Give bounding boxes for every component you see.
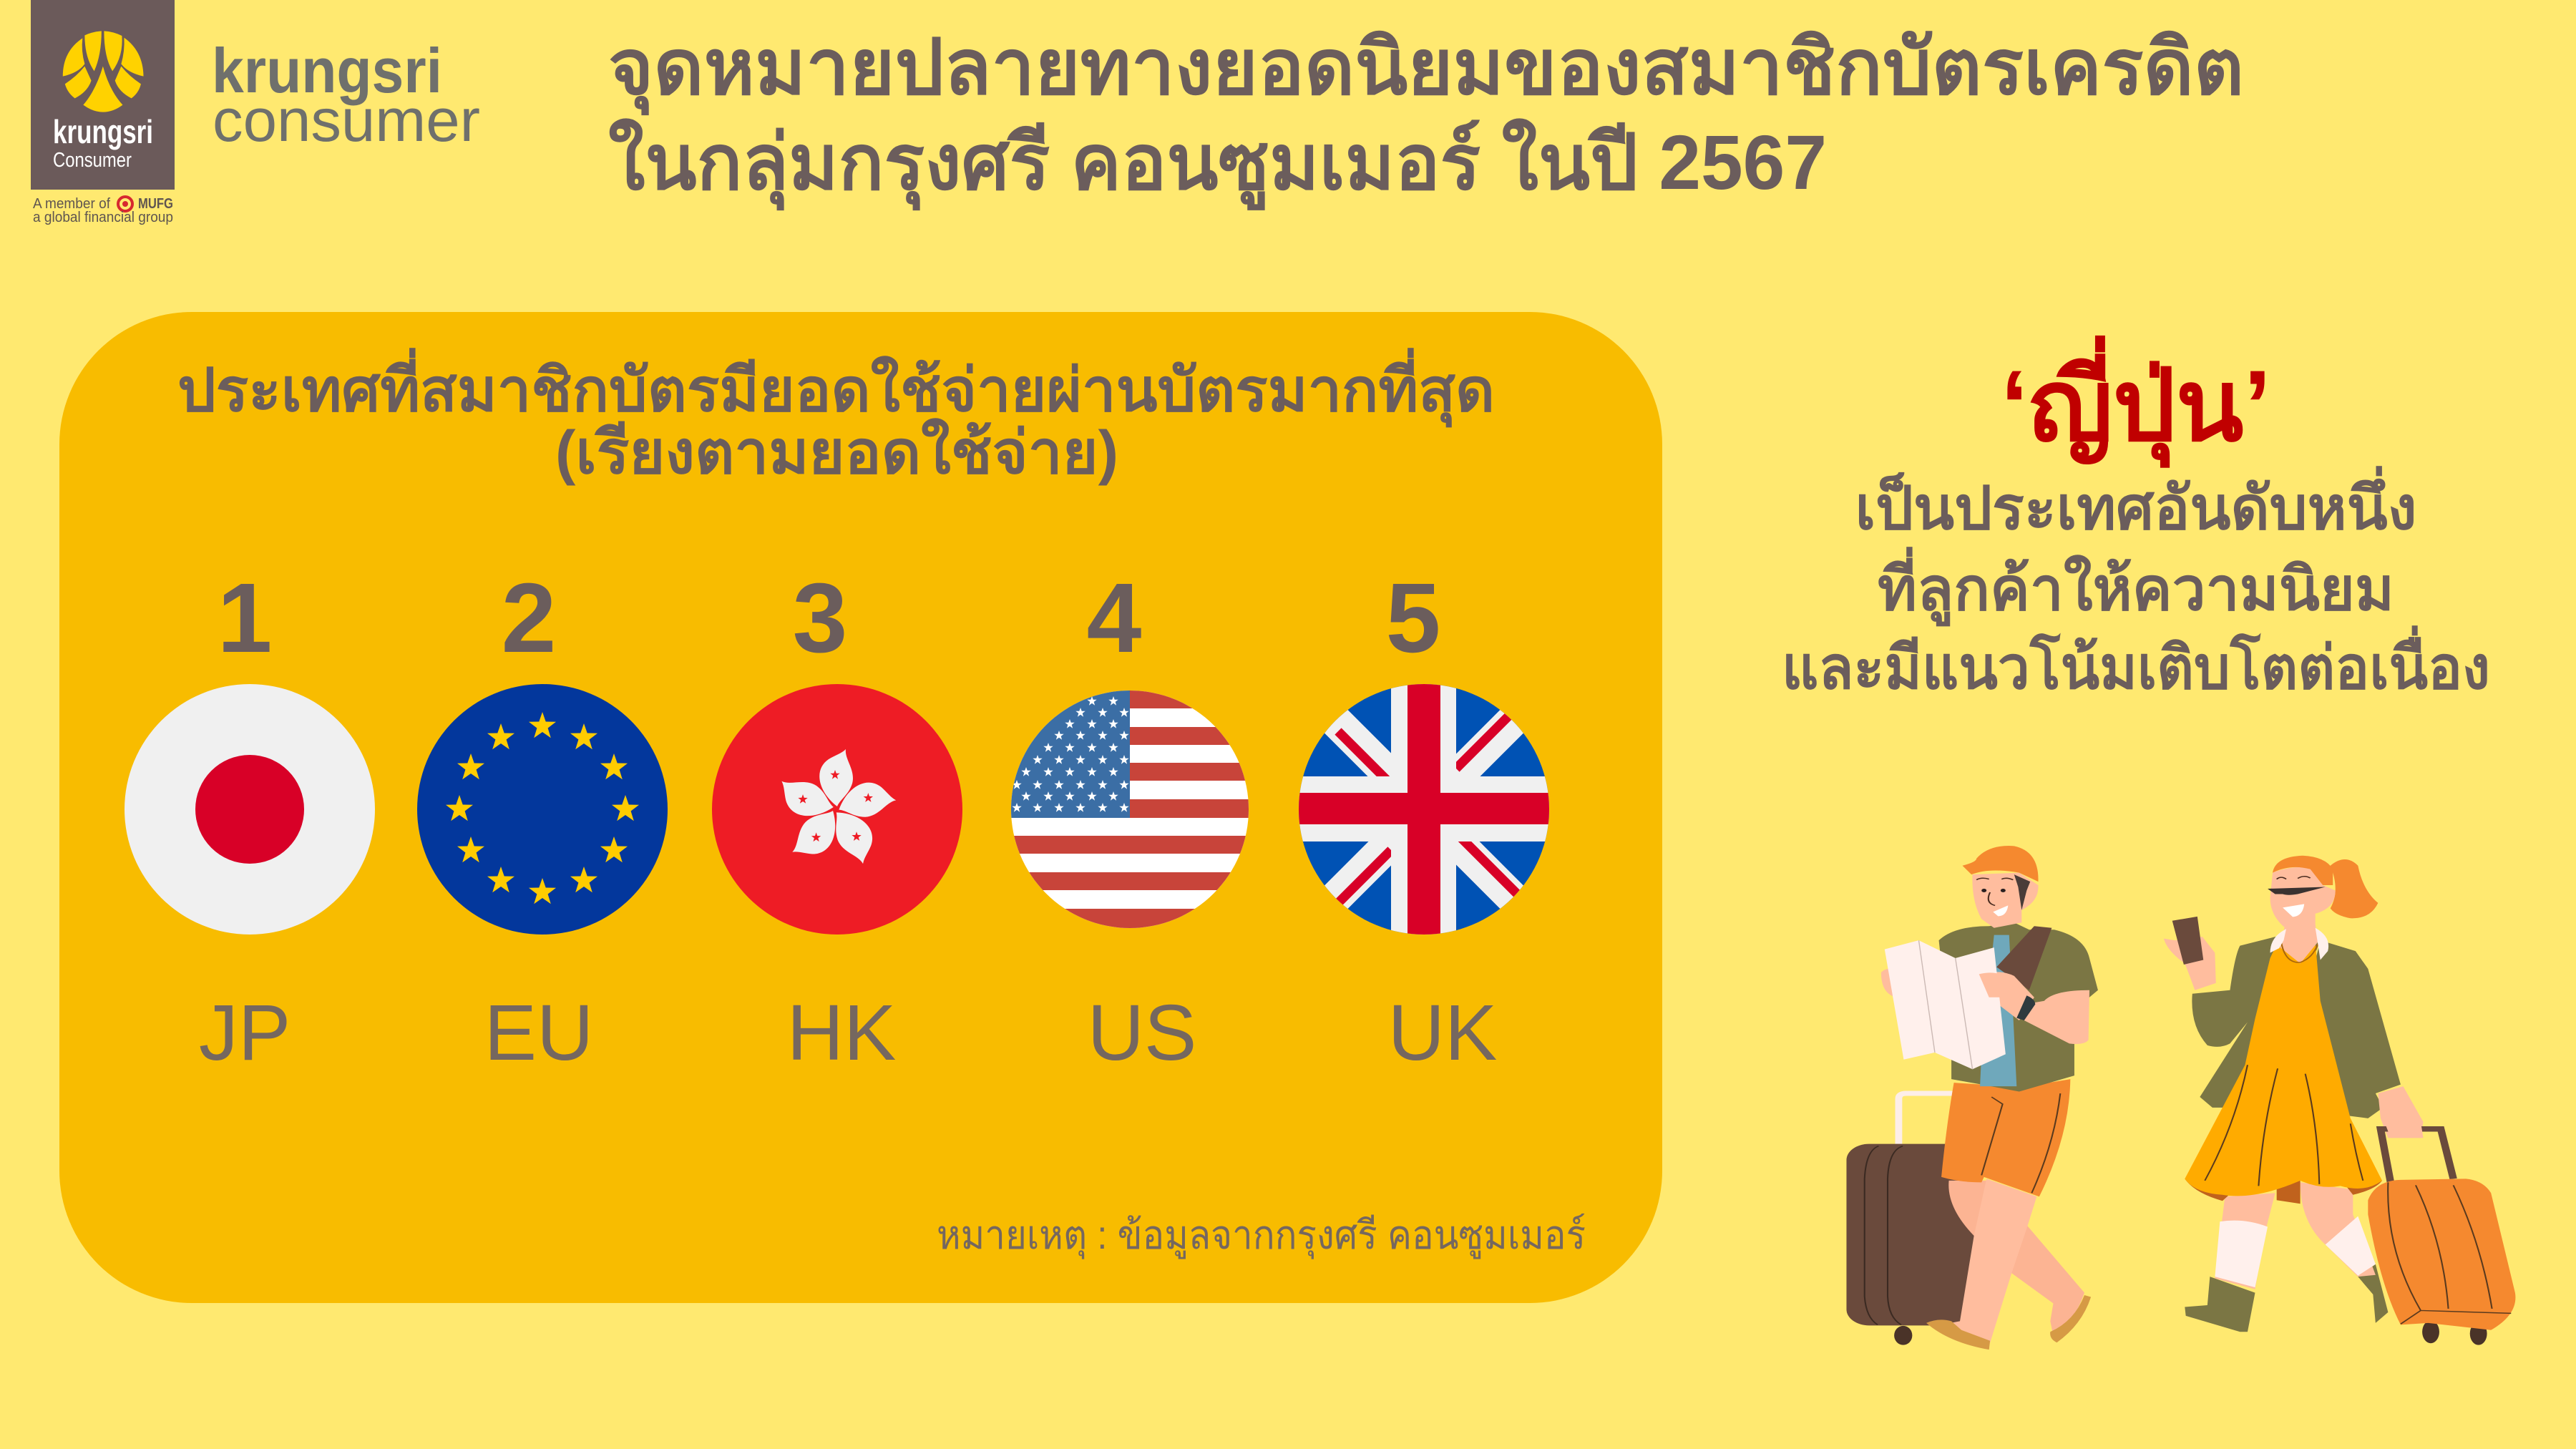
callout: Japan is number one xyxy=(1782,335,2490,701)
rank numbers: 5 xyxy=(1386,563,1440,673)
panel: top five countries xyxy=(59,312,1662,1303)
country codes: HK xyxy=(787,989,896,1077)
logo sub-wordmark: Consumer xyxy=(53,149,132,172)
logo text: krungsri: krungsri xyxy=(212,35,442,106)
icon: krungsri emblem xyxy=(63,31,144,112)
country codes: US xyxy=(1088,989,1196,1077)
title: ในกลุ่มกรุงศรี คอนซูมเมอร์ ในปี 2567 xyxy=(608,119,1827,211)
MUFG member line: A member of xyxy=(33,196,110,212)
logo wordmark: krungsri xyxy=(53,113,153,150)
callout text: เป็นประเทศอันดับหนึ่ง xyxy=(1855,466,2417,542)
callout text xyxy=(1782,466,2490,701)
title: จุดหมายปลายทางยอดนิยมของสมาชิกบัตรเครดิต xyxy=(608,24,2244,116)
callout heading: ‘ญี่ปุ่น’ xyxy=(2001,335,2271,468)
flag: European Union xyxy=(417,684,668,935)
MUFG member line xyxy=(33,196,173,225)
logo text: consumer: consumer xyxy=(213,87,480,154)
flag: Hong Kong xyxy=(712,684,962,935)
rank numbers: 3 xyxy=(793,563,847,673)
illustration: two travellers xyxy=(1846,846,2515,1350)
callout text: และมีแนวโน้มเติบโตต่อเนื่อง xyxy=(1782,625,2490,701)
callout text: ที่ลูกค้าให้ความนิยม xyxy=(1878,547,2394,627)
country codes: JP xyxy=(199,989,291,1077)
icon: MUFG mark xyxy=(118,197,132,211)
MUFG member line: a global financial group xyxy=(33,210,173,225)
flag: United Kingdom xyxy=(1295,680,1553,937)
MUFG member line: MUFG xyxy=(138,196,173,212)
rank numbers: 4 xyxy=(1087,563,1142,673)
woman with phone and orange suitcase xyxy=(2164,856,2515,1345)
flag: Japan xyxy=(125,684,375,935)
logo: krungsri consumer badge xyxy=(31,0,175,190)
panel heading: ประเทศที่สมาชิกบัตรมียอดใช้จ่ายผ่านบัตรมากที่สุด xyxy=(177,348,1495,428)
rank numbers xyxy=(218,563,1440,673)
rank numbers: 2 xyxy=(502,563,556,673)
panel heading xyxy=(177,348,1495,486)
title xyxy=(608,24,2244,211)
country codes: UK xyxy=(1388,989,1497,1077)
panel heading: (เรียงตามยอดใช้จ่าย) xyxy=(555,418,1118,486)
country codes xyxy=(199,989,1497,1077)
country codes: EU xyxy=(484,989,593,1077)
footnote: หมายเหตุ : ข้อมูลจากกรุงศรี คอนซูมเมอร์ xyxy=(937,1212,1586,1259)
rank numbers: 1 xyxy=(218,563,272,673)
flag: United States xyxy=(1009,687,1252,930)
man with map and brown suitcase xyxy=(1846,846,2098,1350)
